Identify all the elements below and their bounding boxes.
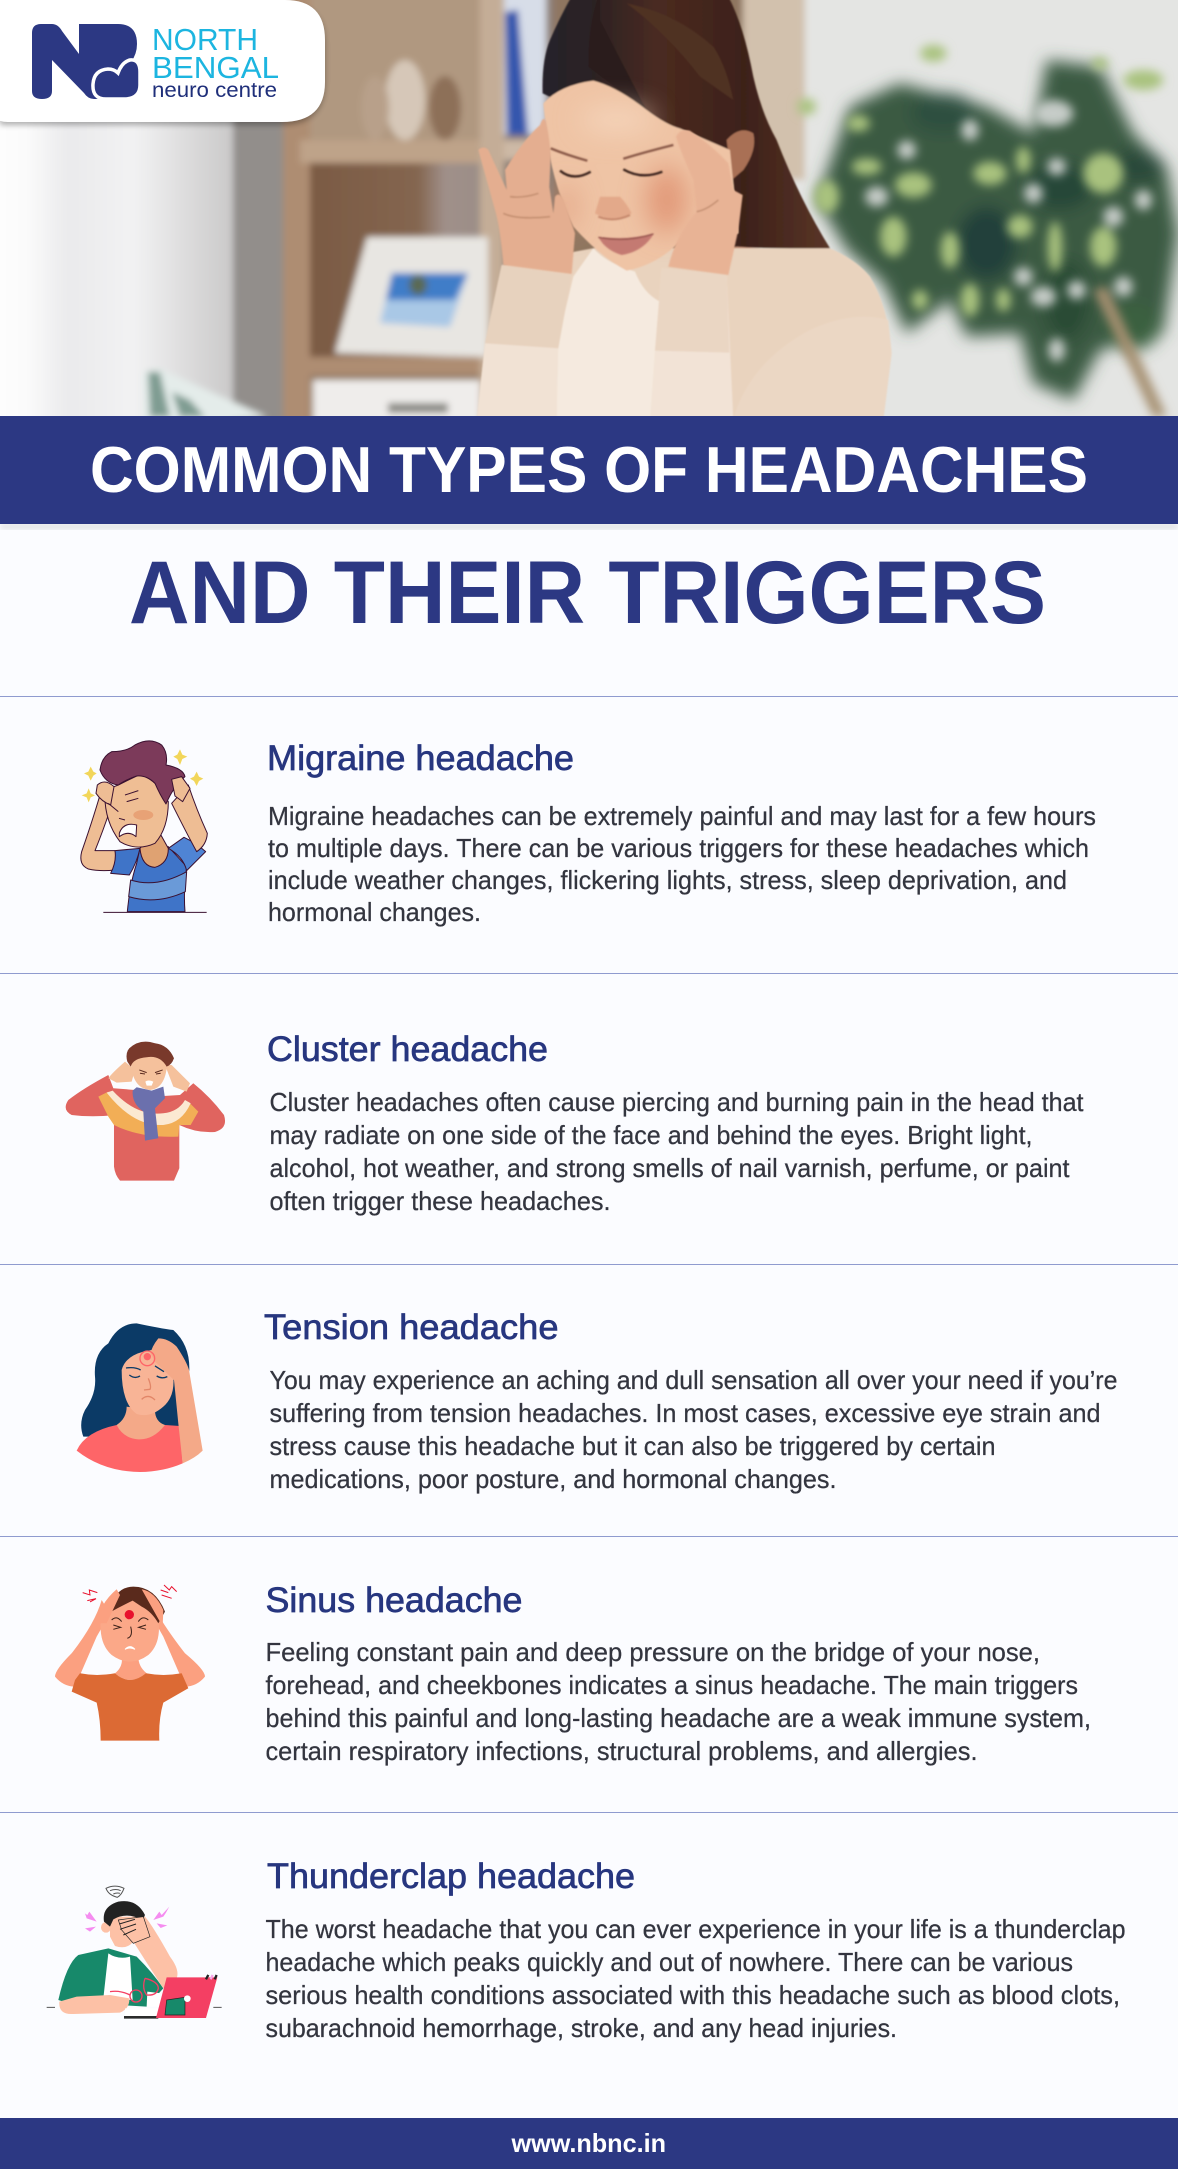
description: suffering from tension headaches. In most cases, excessive eye strain and	[270, 1398, 1100, 1428]
panel: thunderclap headache	[47, 1857, 1125, 2043]
blurred room background	[0, 0, 1178, 440]
panel: sinus headache	[55, 1581, 1091, 1766]
heading: Migraine headache	[267, 739, 574, 778]
description: often trigger these headaches.	[270, 1186, 610, 1216]
description	[268, 801, 1096, 927]
title band	[0, 416, 1178, 529]
description: Migraine headaches can be extremely painful and may last for a few hours	[268, 801, 1096, 831]
hero photo: woman with headache	[0, 0, 1178, 440]
logo badge	[0, 0, 325, 125]
description	[266, 1914, 1126, 2043]
heading: Sinus headache	[266, 1581, 522, 1620]
description: alcohol, hot weather, and strong smells of nail varnish, perfume, or paint	[270, 1153, 1070, 1183]
icon: man at laptop	[47, 1886, 222, 2019]
description: The worst headache that you can ever experience in your life is a thunderclap	[266, 1914, 1126, 1944]
description	[270, 1087, 1084, 1216]
icon: man holding head	[81, 741, 207, 912]
heading: Cluster headache	[267, 1030, 548, 1069]
description: Feeling constant pain and deep pressure on the bridge of your nose,	[266, 1637, 1040, 1667]
description	[270, 1365, 1118, 1494]
icon: man in sweater and scarf	[66, 1042, 225, 1181]
soft face shading	[557, 107, 687, 233]
logo text	[152, 22, 279, 102]
description: behind this painful and long-lasting headache are a weak immune system,	[266, 1703, 1091, 1733]
logo text: BENGAL	[152, 50, 279, 85]
description: include weather changes, flickering lights, stress, sleep deprivation, and	[268, 865, 1067, 895]
logo text: NORTH	[152, 22, 258, 57]
subtitle: AND THEIR TRIGGERS	[129, 542, 1046, 642]
description: certain respiratory infections, structural problems, and allergies.	[266, 1736, 978, 1766]
description: to multiple days. There can be various triggers for these headaches which	[268, 833, 1089, 863]
description: stress cause this headache but it can also be triggered by certain	[270, 1431, 996, 1461]
footer bar: www.nbnc.in	[511, 2128, 666, 2158]
description: medications, poor posture, and hormonal changes.	[270, 1464, 836, 1494]
heading: Thunderclap headache	[267, 1857, 635, 1896]
description: You may experience an aching and dull sensation all over your need if you’re	[270, 1365, 1118, 1395]
description: Cluster headaches often cause piercing and burning pain in the head that	[270, 1087, 1084, 1117]
heading: Tension headache	[264, 1308, 558, 1347]
woman	[477, 0, 892, 420]
description: hormonal changes.	[268, 897, 481, 927]
title band: COMMON TYPES OF HEADACHES	[90, 433, 1088, 506]
logo text: neuro centre	[152, 79, 277, 102]
panel: migraine headache	[81, 739, 1096, 927]
icon: woman touching forehead	[77, 1323, 203, 1472]
blurred plant	[797, 45, 1178, 417]
description: serious health conditions associated with this headache such as blood clots,	[266, 1980, 1120, 2010]
description: may radiate on one side of the face and behind the eyes. Bright light,	[270, 1120, 1032, 1150]
description: headache which peaks quickly and out of nowhere. There can be various	[266, 1947, 1073, 1977]
description: forehead, and cheekbones indicates a sinus headache. The main triggers	[266, 1670, 1078, 1700]
panel: cluster headache	[66, 1030, 1084, 1216]
logo mark NB	[32, 24, 140, 99]
description	[266, 1637, 1091, 1766]
panel: tension headache	[77, 1308, 1118, 1494]
icon: boy with red dot on forehead	[55, 1585, 205, 1741]
footer bar	[0, 2118, 1178, 2169]
description: subarachnoid hemorrhage, stroke, and any head injuries.	[266, 2013, 897, 2043]
